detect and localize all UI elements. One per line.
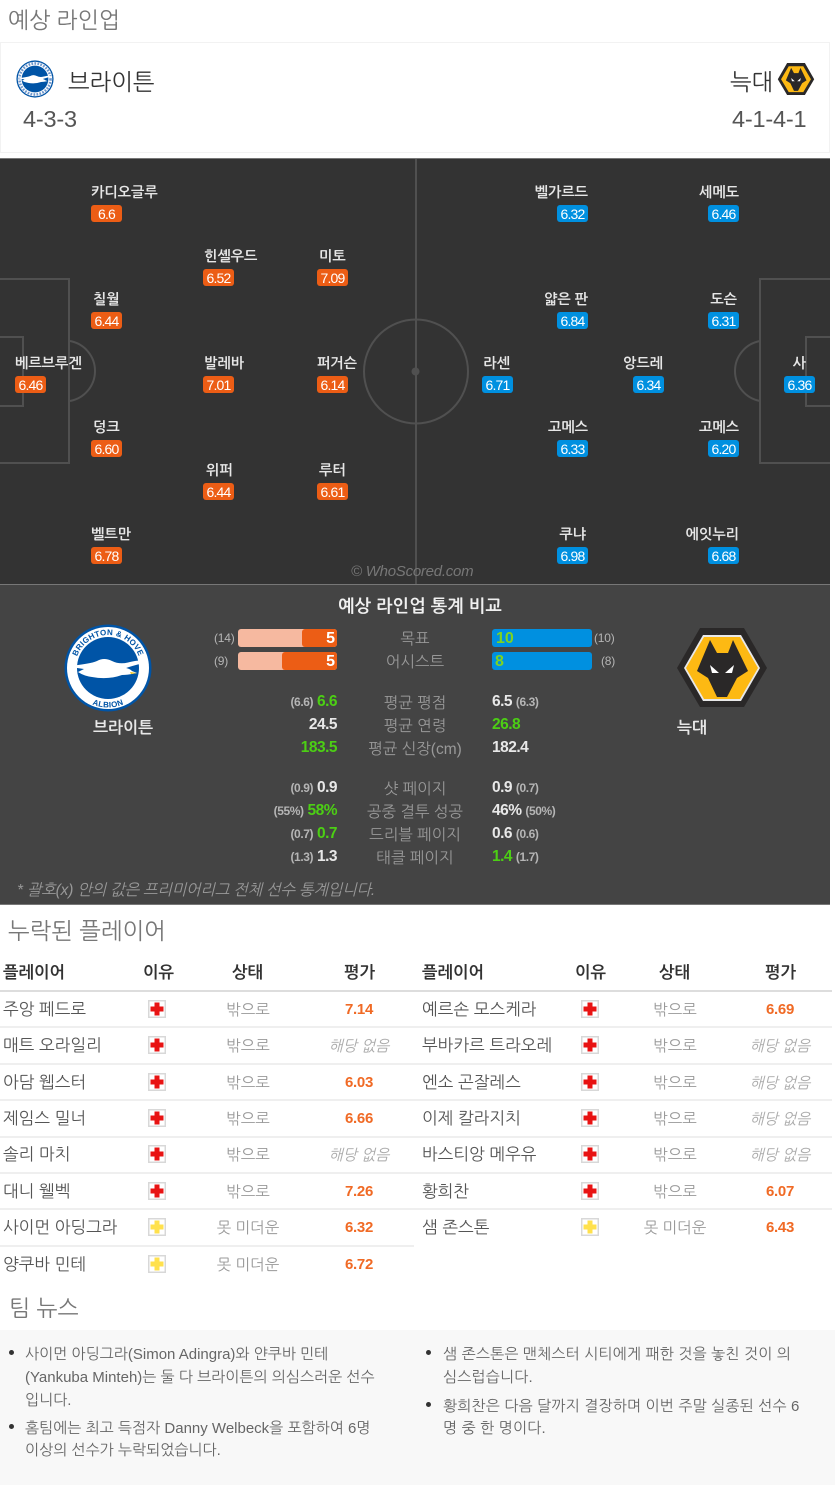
heading: missing players: 누락된 플레이어	[8, 918, 166, 944]
row: 매트 오라일리: 매트 오라일리	[3, 1036, 102, 1055]
bar row: goals home: 5	[326, 630, 335, 647]
row: 대니 웰벡: 밖으로	[226, 1184, 270, 1201]
row: 솔리 마치: 밖으로	[226, 1147, 270, 1164]
stats title: 예상 라인업 통계 비교	[338, 596, 502, 616]
player: 힌셸우드	[203, 249, 258, 286]
player: 미토	[317, 249, 348, 286]
column: status: 상태	[232, 964, 263, 982]
player: 고메스 (centre): 6.33	[560, 441, 585, 457]
player: 퍼거슨	[317, 356, 357, 393]
player: 도슨: 6.31	[711, 313, 736, 329]
bullet text: Johnstone: 심스럽습니다.	[443, 1369, 533, 1386]
player: 발레바: 발레바	[204, 356, 244, 372]
row: 이제 칼라지치: 해당 없음	[750, 1111, 810, 1128]
player: 고메스 (centre): 고메스	[548, 420, 588, 436]
player: 라센: 6.71	[485, 377, 510, 393]
icon: Wolves crest large	[677, 628, 767, 707]
player: 벨트만: 6.78	[94, 548, 119, 564]
row: 양쿠바 민테: 6.72	[345, 1256, 373, 1273]
player: 도슨: 도슨	[710, 292, 737, 308]
bullet text: Adingra and Minteh: 사이먼 아딩그라(Simon Adingra)와 얀쿠바 민테	[25, 1346, 328, 1363]
home value: aerials: (55%) 58%	[274, 802, 337, 819]
home value: dribbles: (0.7) 0.7	[290, 825, 337, 842]
stat label: tackles: 태클 페이지	[376, 850, 454, 867]
icon: Brighton crest large: BRIGHTON & HOVE	[72, 629, 144, 656]
bullet text: Adingra and Minteh	[0, 1341, 400, 1410]
away value: rating: 6.5 (6.3)	[492, 693, 539, 710]
player: 루터	[317, 463, 348, 500]
row: 이제 칼라지치: 밖으로	[653, 1111, 697, 1128]
bullet text: Adingra and Minteh: (Yankuba Minteh)는 둘 다 브라이튼의 의심스러운 선수	[25, 1369, 375, 1386]
away value: height: 182.4	[492, 739, 528, 756]
player: 덩크: 6.60	[94, 441, 119, 457]
panel: team news	[0, 1330, 835, 1485]
player: 미토: 7.09	[320, 270, 345, 286]
player: 얇은 판: 얇은 판	[544, 292, 588, 308]
player: 쿠냐: 쿠냐	[559, 527, 586, 543]
player: 사	[784, 356, 815, 393]
player: 위퍼: 위퍼	[206, 463, 233, 479]
team label: Brighton: 브라이튼	[93, 720, 153, 737]
row: 엔소 곤잘레스: 엔소 곤잘레스	[422, 1073, 521, 1092]
row: 주앙 페드로	[0, 991, 414, 1026]
row: 제임스 밀너: 제임스 밀너	[3, 1109, 86, 1128]
row: 바스티앙 메우유	[414, 1136, 832, 1171]
player: 발레바	[203, 356, 244, 393]
row: 황희찬: 밖으로	[653, 1184, 697, 1201]
row: 솔리 마치: 솔리 마치	[3, 1145, 70, 1164]
away value: tackles: 1.4 (1.7)	[492, 848, 539, 865]
row: 샘 존스톤: 샘 존스톤	[422, 1218, 489, 1237]
stat label: aerials: 공중 결투 성공	[367, 804, 463, 821]
row: 제임스 밀너: 밖으로	[226, 1111, 270, 1128]
row: 바스티앙 메우유: 밖으로	[653, 1147, 697, 1164]
player: 카디오글루: 6.6	[98, 206, 115, 222]
player: 에잇누리: 에잇누리	[686, 527, 739, 543]
player: 사: 6.36	[787, 377, 812, 393]
column: status: 상태	[659, 964, 690, 982]
bar row: goals home	[214, 629, 337, 647]
row: 아담 웹스터: 6.03	[345, 1074, 373, 1091]
column: rating: 평가	[765, 964, 796, 982]
row: 황희찬: 황희찬	[422, 1182, 469, 1201]
table header: home	[0, 959, 414, 983]
player: 세메도	[699, 185, 739, 222]
player: 힌셸우드: 6.52	[206, 270, 231, 286]
player: 앙드레	[623, 356, 664, 393]
home value: shots: (0.9) 0.9	[290, 779, 337, 796]
player: 벨트만	[91, 527, 131, 564]
row: 예르손 모스케라: 예르손 모스케라	[422, 1000, 536, 1019]
row: 주앙 페드로: 주앙 페드로	[3, 1000, 86, 1019]
player: 라센	[482, 356, 513, 393]
away value: aerials: 46% (50%)	[492, 802, 555, 819]
player: 베르브루겐	[15, 356, 82, 393]
player: 베르브루겐: 6.46	[18, 377, 43, 393]
player: 칠월: 칠월	[93, 292, 120, 308]
player: 위퍼: 6.44	[206, 484, 231, 500]
player: 벨가르드: 6.32	[560, 206, 585, 222]
bar row: assists away: 8	[495, 653, 504, 670]
row: 대니 웰벡	[0, 1173, 414, 1208]
bar row: assists away: (8)	[601, 654, 615, 668]
row: 부바카르 트라오레	[414, 1027, 832, 1062]
row: 부바카르 트라오레: 해당 없음	[750, 1038, 810, 1055]
panel: pitch	[0, 158, 830, 585]
row: 황희찬: 6.07	[766, 1183, 794, 1200]
row: 황희찬	[414, 1173, 832, 1208]
player: 벨가르드: 벨가르드	[535, 185, 588, 201]
bar row: assists home: (9)	[214, 654, 228, 668]
row: 아담 웹스터: 밖으로	[226, 1075, 270, 1092]
player: 위퍼	[203, 463, 234, 500]
row: 예르손 모스케라: 밖으로	[653, 1002, 697, 1019]
bar row: assists home: 5	[326, 653, 335, 670]
row: 양쿠바 민테: 양쿠바 민테	[3, 1255, 86, 1274]
row: 엔소 곤잘레스	[414, 1064, 832, 1099]
bar row: goals away: 10	[496, 630, 514, 647]
bullet text: home missing players	[0, 1415, 400, 1461]
bullet text: Hwang: 명 중 한 명이다.	[443, 1420, 546, 1437]
home value: tackles: (1.3) 1.3	[290, 848, 337, 865]
panel: team header	[0, 42, 830, 153]
player: 세메도: 6.46	[711, 206, 736, 222]
row: 예르손 모스케라: 6.69	[766, 1001, 794, 1018]
player: 라센: 라센	[483, 356, 510, 372]
player: 칠월	[91, 292, 122, 329]
bar row: goals home: (14)	[214, 631, 235, 645]
bar row: goals away: (10)	[594, 631, 615, 645]
row: 예르손 모스케라	[414, 991, 832, 1026]
player: 힌셸우드: 힌셸우드	[204, 249, 257, 265]
row: 양쿠바 민테	[0, 1246, 414, 1281]
icon: Brighton crest small	[16, 60, 54, 98]
icon: Wolves crest small	[778, 63, 814, 95]
bullet text: Hwang	[420, 1393, 820, 1439]
row: 이제 칼라지치	[414, 1100, 832, 1135]
player: 쿠냐	[557, 527, 588, 564]
team name: Brighton: 브라이튼	[68, 69, 154, 95]
row: 부바카르 트라오레: 밖으로	[653, 1038, 697, 1055]
row: 부바카르 트라오레: 부바카르 트라오레	[422, 1036, 552, 1055]
row: 매트 오라일리: 해당 없음	[329, 1038, 389, 1055]
row: 대니 웰벡: 대니 웰벡	[3, 1182, 70, 1201]
player: 앙드레: 앙드레	[623, 356, 663, 372]
panel: lineup stats comparison	[0, 584, 830, 905]
player: 세메도: 세메도	[699, 185, 739, 201]
row: 대니 웰벡: 7.26	[345, 1183, 373, 1200]
row: 솔리 마치: 해당 없음	[329, 1147, 389, 1164]
row: 샘 존스톤: 못 미더운	[644, 1220, 706, 1237]
player: 고메스 (centre)	[548, 420, 588, 457]
player: 에잇누리	[686, 527, 739, 564]
bar row: assists away	[492, 652, 615, 670]
pitch lines	[0, 159, 830, 584]
row: 바스티앙 메우유: 해당 없음	[750, 1147, 810, 1164]
away value: shots: 0.9 (0.7)	[492, 779, 539, 796]
formation: Wolves: 4-1-4-1	[732, 106, 806, 132]
player: 미토: 미토	[319, 249, 346, 265]
player: 루터: 루터	[319, 463, 346, 479]
bullet text: Adingra and Minteh: 입니다.	[25, 1392, 71, 1409]
row: 제임스 밀너	[0, 1100, 414, 1135]
player: 얇은 판	[544, 292, 588, 329]
row: 아담 웹스터	[0, 1064, 414, 1099]
player: 발레바: 7.01	[206, 377, 231, 393]
row: 엔소 곤잘레스: 밖으로	[653, 1075, 697, 1092]
player: 앙드레: 6.34	[636, 377, 661, 393]
formation: Brighton: 4-3-3	[23, 106, 77, 132]
heading: team news: 팀 뉴스	[9, 1296, 79, 1321]
home value: age: 24.5	[309, 716, 337, 733]
home value: rating: (6.6) 6.6	[290, 693, 337, 710]
player: 루터: 6.61	[320, 484, 345, 500]
player: 사: 사	[793, 356, 806, 372]
row: 샘 존스톤	[414, 1209, 832, 1244]
column: reason: 이유	[575, 964, 606, 982]
player: 벨가르드	[535, 185, 588, 222]
player: 얇은 판: 6.84	[560, 313, 585, 329]
row: 엔소 곤잘레스: 해당 없음	[750, 1075, 810, 1092]
bar row: goals away	[492, 629, 615, 647]
player: 칠월: 6.44	[94, 313, 119, 329]
player: 카디오글루: 카디오글루	[91, 185, 158, 201]
bullet text: Johnstone	[420, 1341, 820, 1387]
team name: Wolves: 늑대	[730, 69, 773, 95]
stat label: goals: 목표	[400, 631, 430, 648]
player: 베르브루겐: 베르브루겐	[15, 356, 82, 372]
column: reason: 이유	[143, 964, 174, 982]
away value: dribbles: 0.6 (0.6)	[492, 825, 539, 842]
row: 양쿠바 민테: 못 미더운	[217, 1257, 279, 1274]
heading: predicted lineups: 예상 라인업	[8, 8, 120, 33]
bullet text: home missing players: 홈팀에는 최고 득점자 Danny Welbeck을 포함하여 6명	[25, 1420, 370, 1437]
row: 사이먼 아딩그라: 6.32	[345, 1219, 373, 1236]
player: 고메스 (right)	[699, 420, 739, 457]
away value: age: 26.8	[492, 716, 520, 733]
stat label: shots: 샷 페이지	[384, 781, 446, 798]
stat label: assists: 어시스트	[386, 654, 444, 671]
column: rating: 평가	[344, 964, 375, 982]
row: 사이먼 아딩그라: 사이먼 아딩그라	[3, 1218, 117, 1237]
player: 덩크	[91, 420, 122, 457]
home value: height: 183.5	[301, 739, 337, 756]
row: 주앙 페드로: 밖으로	[226, 1002, 270, 1019]
row: 바스티앙 메우유: 바스티앙 메우유	[422, 1145, 536, 1164]
row: 매트 오라일리: 밖으로	[226, 1038, 270, 1055]
player: 덩크: 덩크	[93, 420, 120, 436]
stat label: average height: 평균 신장(cm)	[368, 741, 462, 758]
player: 카디오글루	[91, 185, 158, 222]
row: 이제 칼라지치: 이제 칼라지치	[422, 1109, 521, 1128]
row: 주앙 페드로: 7.14	[345, 1001, 373, 1018]
row: 아담 웹스터: 아담 웹스터	[3, 1073, 86, 1092]
row: 매트 오라일리	[0, 1027, 414, 1062]
column: player: 플레이어	[3, 964, 65, 982]
team label: Wolves: 늑대	[677, 720, 707, 737]
player: 쿠냐: 6.98	[560, 548, 585, 564]
player: 퍼거슨: 6.14	[320, 377, 345, 393]
player: 도슨	[708, 292, 739, 329]
player: 고메스 (right): 6.20	[711, 441, 736, 457]
stat label: average rating: 평균 평점	[384, 695, 446, 712]
player: 에잇누리: 6.68	[711, 548, 736, 564]
table header: away	[414, 959, 832, 983]
stat label: dribbles: 드리블 페이지	[369, 827, 461, 844]
row: 솔리 마치	[0, 1136, 414, 1171]
row: 사이먼 아딩그라	[0, 1209, 414, 1244]
player: 퍼거슨: 퍼거슨	[317, 356, 357, 372]
row: 샘 존스톤: 6.43	[766, 1219, 794, 1236]
icon: Brighton crest large: ALBION	[92, 699, 123, 708]
bullet text: home missing players: 이상의 선수가 누락되었습니다.	[25, 1442, 221, 1459]
player: 고메스 (right): 고메스	[699, 420, 739, 436]
player: 벨트만: 벨트만	[91, 527, 131, 543]
watermark: © WhoScored.com	[351, 563, 473, 580]
row: 제임스 밀너: 6.66	[345, 1110, 373, 1127]
column: player: 플레이어	[422, 964, 484, 982]
stat label: average age: 평균 연령	[384, 718, 446, 735]
footnote: * 괄호(x) 안의 값은 프리미어리그 전체 선수 통계입니다.	[17, 882, 375, 899]
bar row: assists home	[214, 652, 337, 670]
row: 사이먼 아딩그라: 못 미더운	[217, 1220, 279, 1237]
bullet text: Hwang: 황희찬은 다음 달까지 결장하며 이번 주말 실종된 선수 6	[443, 1398, 800, 1415]
bullet text: Johnstone: 샘 존스톤은 맨체스터 시티에게 패한 것을 놓친 것이 의	[443, 1346, 791, 1363]
icon: Brighton crest large	[64, 624, 152, 712]
